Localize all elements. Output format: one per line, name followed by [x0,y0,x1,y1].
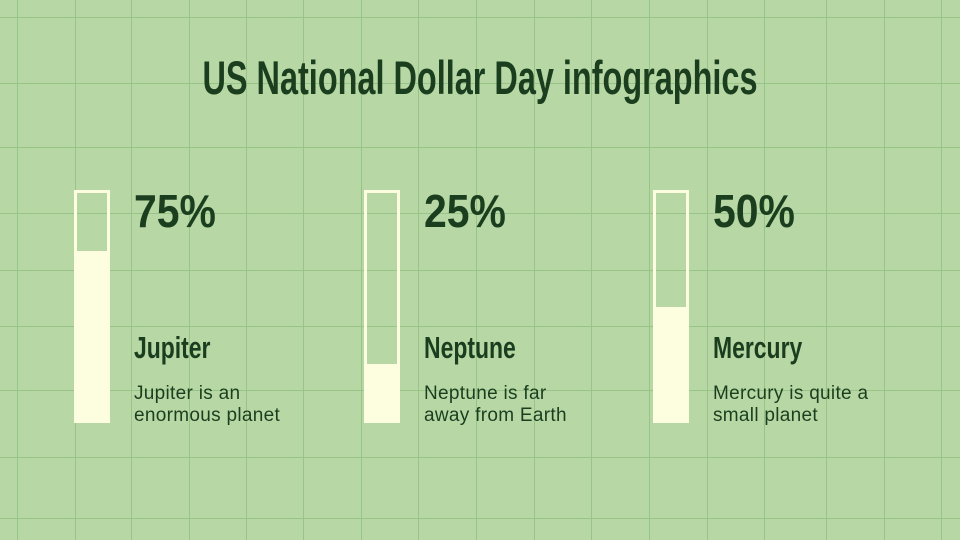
percent: 75% [134,185,216,237]
bar: 50% [653,190,689,423]
percent: 25% [424,185,506,237]
title: US National Dollar Day infographics [202,51,758,104]
percent: 50% [713,185,795,237]
bar: 75% [74,190,110,423]
name: Mercury [713,330,802,365]
description: Jupiter is an enormous planet [134,383,280,426]
name: Neptune [424,330,516,365]
name: Jupiter [134,330,210,365]
description: Mercury is quite a small planet [713,383,868,426]
description: Neptune is far away from Earth [424,383,567,426]
bar: 25% [364,190,400,423]
